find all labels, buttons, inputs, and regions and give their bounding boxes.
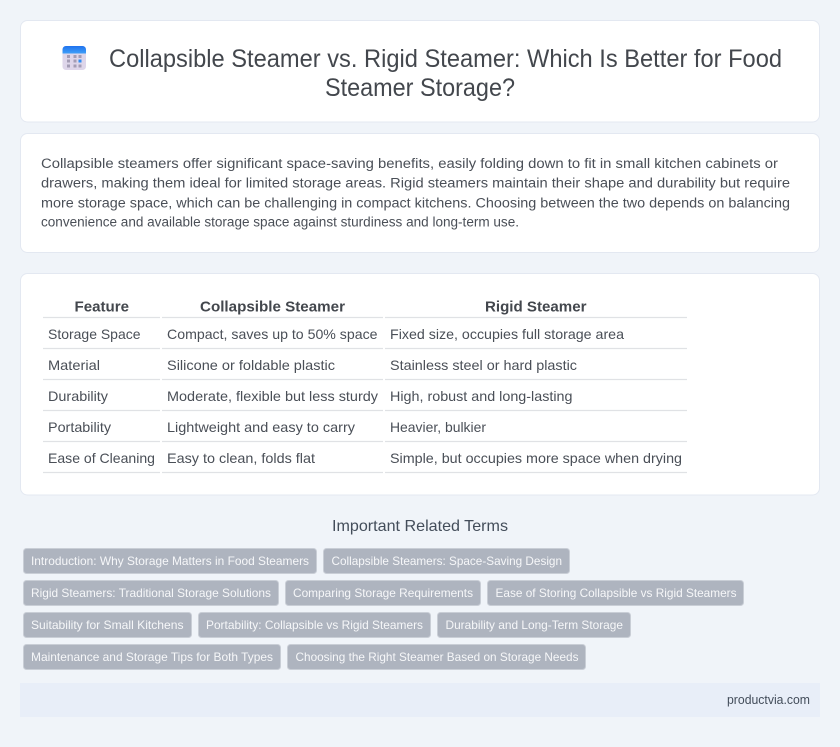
tag: Suitability for Small Kitchens xyxy=(31,618,184,632)
tag: Choosing the Right Steamer Based on Storage Needs xyxy=(296,650,578,664)
table row: portability: Heavier, bulkier xyxy=(390,419,486,435)
tag xyxy=(324,548,570,574)
footer: productvia.com xyxy=(727,693,810,707)
text block: introduction paragraph: more storage space, which can be challenging in compact kitchens. Choosing between the two depends on balancing xyxy=(41,196,790,212)
panel: related term tags xyxy=(24,548,744,670)
table row: portability: Portability xyxy=(48,419,111,435)
table row: ease of cleaning: Easy to clean, folds flat xyxy=(167,450,315,466)
panel: comparison table xyxy=(20,274,820,495)
tag: Introduction: Why Storage Matters in Food Steamers xyxy=(31,554,309,568)
tag: Durability and Long-Term Storage xyxy=(446,618,623,632)
table header row: Collapsible Steamer xyxy=(200,298,345,316)
table row: material xyxy=(48,357,577,373)
tag xyxy=(24,580,278,606)
tag: Collapsible Steamers: Space-Saving Design xyxy=(332,554,562,568)
title: Collapsible Steamer vs. Rigid Steamer: Which Is Better for Food xyxy=(109,45,782,73)
table row: durability: High, robust and long-lasting xyxy=(390,388,572,404)
table row: storage space: Fixed size, occupies full storage area xyxy=(390,326,624,342)
table row: portability: Lightweight and easy to carry xyxy=(167,419,355,435)
title: Steamer Storage? xyxy=(325,74,515,102)
table grid lines xyxy=(43,318,687,472)
tag xyxy=(24,644,280,670)
tag: Ease of Storing Collapsible vs Rigid Steamers xyxy=(496,586,736,600)
table row: material: Silicone or foldable plastic xyxy=(167,357,335,373)
table row: ease of cleaning: Simple, but occupies more space when drying xyxy=(390,450,682,466)
text block: introduction paragraph xyxy=(41,156,790,230)
tag xyxy=(24,612,192,638)
text block: introduction paragraph: Collapsible steamers offer significant space-saving benefits, easily folding down to fit in small kitchen cabinets or xyxy=(41,156,778,172)
table row: storage space xyxy=(48,326,624,342)
table row: portability xyxy=(48,419,486,435)
table row: ease of cleaning xyxy=(48,450,682,466)
tag xyxy=(488,580,744,606)
table header row xyxy=(74,298,587,316)
tag xyxy=(288,644,586,670)
panel: introduction xyxy=(20,134,820,252)
table row: material: Stainless steel or hard plastic xyxy=(390,357,577,373)
tag xyxy=(438,612,630,638)
title xyxy=(109,45,782,102)
table header row: Feature xyxy=(74,298,129,316)
icon: calendar xyxy=(62,46,86,70)
heading: important related terms: Important Related Terms xyxy=(332,518,508,535)
tag: Comparing Storage Requirements xyxy=(293,586,473,600)
table row: ease of cleaning: Ease of Cleaning xyxy=(48,450,155,466)
tag xyxy=(286,580,480,606)
tag: Portability: Collapsible vs Rigid Steamers xyxy=(206,618,423,632)
tag xyxy=(24,548,316,574)
tag xyxy=(198,612,430,638)
table row: storage space: Storage Space xyxy=(48,326,141,342)
panel: header xyxy=(20,20,820,122)
text block: introduction paragraph: convenience and available storage space against sturdiness and long-term use. xyxy=(41,214,519,230)
table row: durability: Moderate, flexible but less sturdy xyxy=(167,388,378,404)
tag: Maintenance and Storage Tips for Both Types xyxy=(31,650,273,664)
tag: Rigid Steamers: Traditional Storage Solutions xyxy=(31,586,271,600)
text block: introduction paragraph: drawers, making them ideal for limited storage areas. Rigid steamers maintain their shape and durability but require xyxy=(41,176,790,192)
table row: durability xyxy=(48,388,572,404)
table row: storage space: Compact, saves up to 50% space xyxy=(167,326,378,342)
table header row: Rigid Steamer xyxy=(485,298,587,316)
table row: material: Material xyxy=(48,357,100,373)
table row: durability: Durability xyxy=(48,388,108,404)
footer xyxy=(20,683,820,717)
